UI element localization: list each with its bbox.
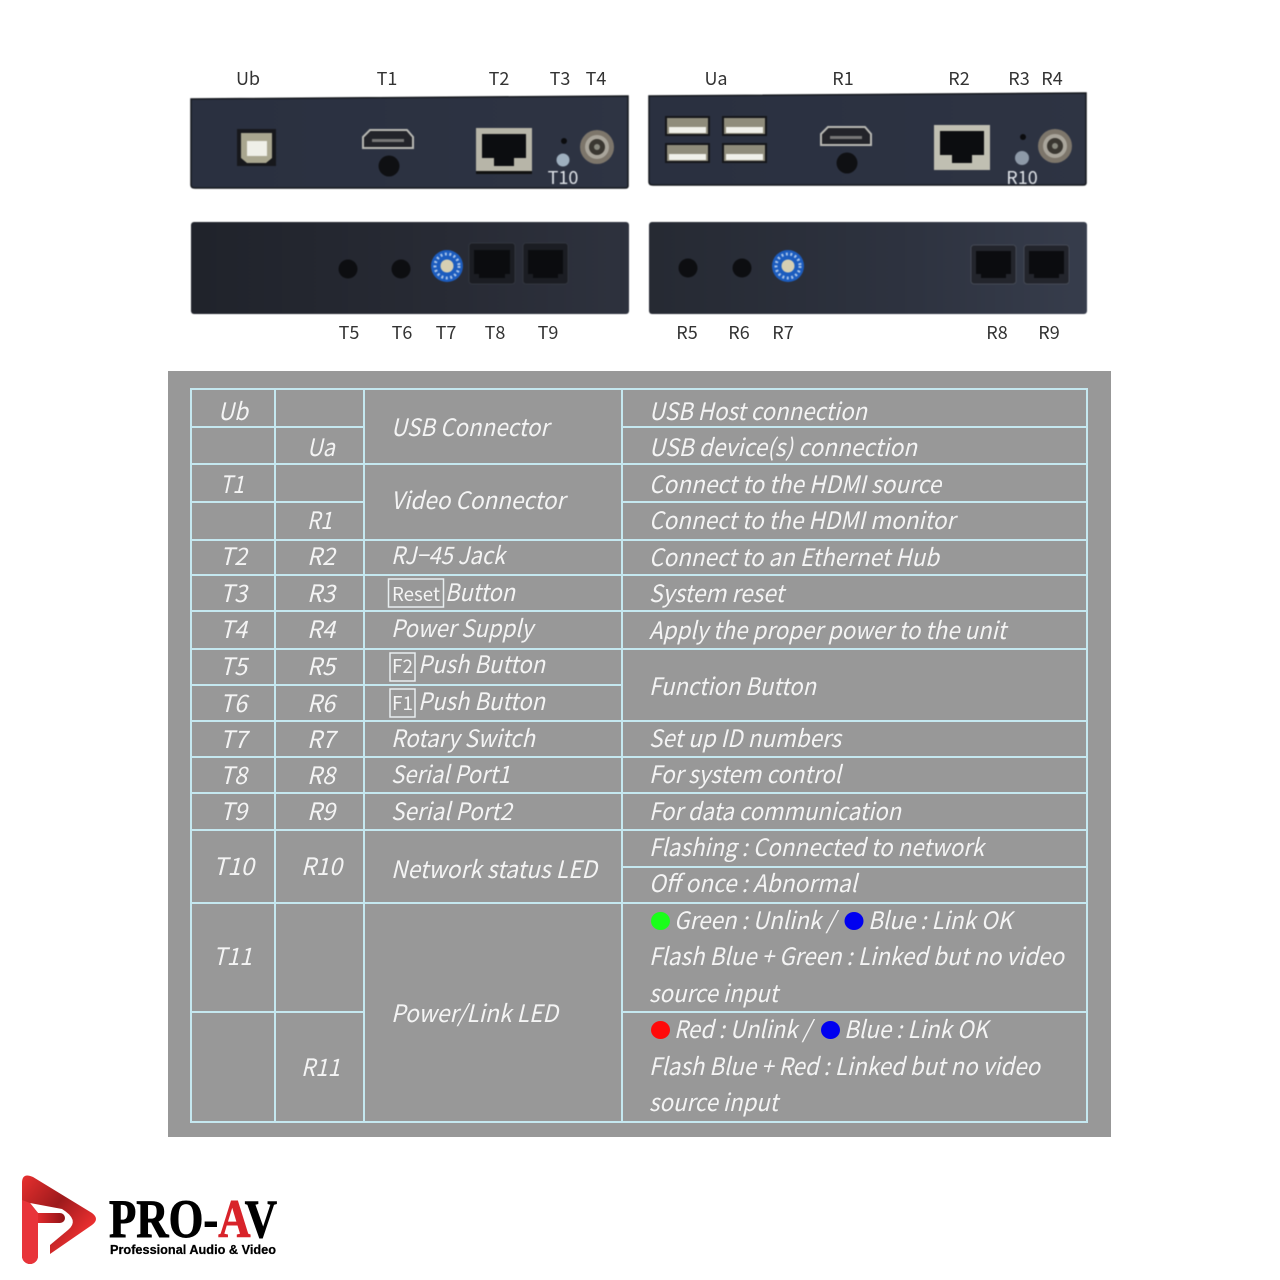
port labels: transmitter rear: T9 bbox=[538, 319, 558, 345]
row: R11 LED states: Blue : Link OK bbox=[844, 1010, 991, 1045]
row: HDMI source bbox=[220, 465, 944, 500]
row: serial port 2: Serial Port2 bbox=[391, 792, 514, 827]
port labels: receiver rear bbox=[676, 319, 1060, 345]
device photo: receiver front: R10 bbox=[1006, 164, 1038, 190]
port labels: transmitter top: Ub bbox=[236, 65, 260, 91]
row: RJ-45: T2 bbox=[220, 537, 250, 572]
row: RJ-45: RJ−45 Jack bbox=[391, 536, 508, 571]
row: rotary switch: Set up ID numbers bbox=[649, 719, 843, 754]
tagline: Professional Audio & Video bbox=[110, 1243, 276, 1257]
port labels: transmitter rear: T7 bbox=[436, 319, 456, 345]
row: reset button: R3 bbox=[307, 574, 338, 609]
row: serial port 1: R8 bbox=[307, 756, 338, 791]
row: R11 LED states: Red : Unlink / bbox=[674, 1010, 815, 1045]
device photo: receiver front bbox=[649, 93, 1086, 190]
row: RJ-45: R2 bbox=[307, 537, 338, 572]
port labels: transmitter rear: T8 bbox=[485, 319, 505, 345]
logo: PRO-AV bbox=[22, 1175, 277, 1266]
port labels: receiver rear: R6 bbox=[728, 319, 750, 345]
row: serial port 1: T8 bbox=[220, 756, 250, 791]
port labels: transmitter top: T3 bbox=[550, 65, 570, 91]
row: reset button: Button bbox=[445, 573, 516, 608]
row: network LED: Off once : Abnormal bbox=[649, 864, 860, 899]
row: F1 button bbox=[220, 682, 546, 719]
port labels: receiver rear: R5 bbox=[676, 319, 698, 345]
row: F2 button bbox=[220, 645, 546, 682]
port labels: transmitter top: T2 bbox=[489, 65, 509, 91]
row: R11 LED states: Flash Blue + Red : Linked but no video bbox=[649, 1047, 1042, 1082]
port labels: receiver top: R4 bbox=[1041, 65, 1063, 91]
row: F2 button: Push Button bbox=[418, 645, 546, 680]
port labels: receiver top: R3 bbox=[1008, 65, 1030, 91]
icon: red play-button P bbox=[22, 1175, 96, 1266]
panel: connector table bbox=[168, 371, 1111, 1137]
row: power/link LED name: Power/Link LED bbox=[391, 994, 560, 1029]
row: USB host: Ub bbox=[218, 392, 250, 427]
row: reset button bbox=[220, 573, 787, 609]
device photo: transmitter front bbox=[191, 96, 628, 190]
port labels: transmitter rear: T6 bbox=[392, 319, 412, 345]
row: video connector name: Video Connector bbox=[391, 481, 568, 516]
row: RJ-45: Connect to an Ethernet Hub bbox=[649, 538, 941, 573]
row: R11 LED states: R11 bbox=[301, 1048, 340, 1083]
port labels: receiver top: R1 bbox=[832, 65, 854, 91]
row: USB host bbox=[218, 392, 868, 427]
port labels: receiver top bbox=[704, 65, 1063, 91]
icon: four USB-A ports bbox=[665, 116, 767, 163]
row: serial port 2: For data communication bbox=[649, 792, 902, 827]
row: HDMI monitor bbox=[307, 501, 958, 536]
row: T11 LED states: Blue : Link OK bbox=[868, 901, 1015, 936]
row: USB device bbox=[307, 428, 918, 463]
device photo: transmitter front: T10 bbox=[548, 164, 578, 190]
row: T11 LED states: Flash Blue + Green : Linked but no video bbox=[649, 937, 1066, 972]
row: serial port 1 bbox=[220, 755, 844, 791]
row: serial port 2: T9 bbox=[220, 792, 250, 827]
row: power supply: R4 bbox=[307, 610, 337, 645]
row: F1 button: T6 bbox=[220, 684, 250, 719]
row: reset button: Reset bbox=[392, 580, 440, 607]
row: rotary switch bbox=[220, 719, 843, 755]
row: F1 button: F1 bbox=[392, 689, 413, 716]
row: T11 LED states: Green : Unlink / bbox=[674, 901, 839, 936]
row: power supply bbox=[220, 609, 1009, 646]
row: T11 LED states: source input bbox=[649, 974, 781, 1009]
port labels: transmitter top: T1 bbox=[377, 65, 397, 91]
row: rotary switch: T7 bbox=[220, 720, 251, 755]
port labels: transmitter rear: T5 bbox=[339, 319, 359, 345]
row: network LED: Flashing : Connected to network bbox=[649, 828, 987, 863]
wordmark: PRO-AV bbox=[109, 1189, 277, 1249]
port labels: receiver rear: R7 bbox=[772, 319, 794, 345]
row: reset button: System reset bbox=[649, 574, 787, 609]
row: network LED: R10 bbox=[301, 847, 345, 882]
row: reset button: T3 bbox=[220, 574, 250, 609]
port labels: transmitter top: T4 bbox=[586, 65, 606, 91]
function button description: Function Button bbox=[649, 667, 817, 702]
row: USB device: USB device(s) connection bbox=[649, 428, 918, 463]
port labels: transmitter top bbox=[236, 65, 606, 91]
row: power supply: Apply the proper power to the unit bbox=[649, 611, 1009, 646]
row: USB host: USB Host connection bbox=[649, 392, 868, 427]
row: R11 LED states: source input bbox=[649, 1083, 781, 1118]
row: network LED: T10 bbox=[213, 847, 257, 882]
device photo: receiver rear bbox=[649, 222, 1087, 314]
row: power supply: Power Supply bbox=[391, 609, 536, 644]
row: serial port 2: R9 bbox=[307, 792, 338, 827]
row: rotary switch: Rotary Switch bbox=[391, 719, 536, 754]
row: HDMI source: Connect to the HDMI source bbox=[649, 465, 944, 500]
row: F1 button: Push Button bbox=[418, 682, 546, 717]
row: HDMI monitor: R1 bbox=[307, 501, 332, 536]
row: serial port 1: Serial Port1 bbox=[391, 755, 510, 790]
row: network LED: Network status LED bbox=[391, 850, 599, 885]
row: serial port 2 bbox=[220, 792, 902, 827]
row: power supply: T4 bbox=[220, 610, 249, 645]
row: HDMI monitor: Connect to the HDMI monitor bbox=[649, 501, 958, 536]
row: F2 button: T5 bbox=[220, 647, 250, 682]
row: network LED bbox=[213, 828, 987, 899]
device photo: transmitter rear bbox=[191, 222, 629, 314]
row: F2 button: R5 bbox=[307, 647, 338, 682]
row: F1 button: R6 bbox=[307, 684, 338, 719]
port labels: receiver top: Ua bbox=[704, 65, 728, 91]
row: RJ-45 bbox=[220, 536, 941, 573]
port labels: transmitter rear bbox=[339, 319, 558, 345]
port labels: receiver rear: R9 bbox=[1038, 319, 1060, 345]
row: serial port 1: For system control bbox=[649, 755, 844, 790]
port labels: receiver top: R2 bbox=[948, 65, 970, 91]
row: R11 LED states bbox=[301, 1010, 1042, 1118]
row: rotary switch: R7 bbox=[307, 720, 339, 755]
port labels: receiver rear: R8 bbox=[986, 319, 1008, 345]
row: HDMI source: T1 bbox=[220, 465, 244, 500]
row: USB connector name: USB Connector bbox=[391, 408, 552, 443]
row: T11 LED states bbox=[213, 901, 1066, 1009]
row: USB device: Ua bbox=[307, 428, 336, 463]
row: F2 button: F2 bbox=[392, 652, 413, 679]
row: T11 LED states: T11 bbox=[213, 937, 252, 972]
